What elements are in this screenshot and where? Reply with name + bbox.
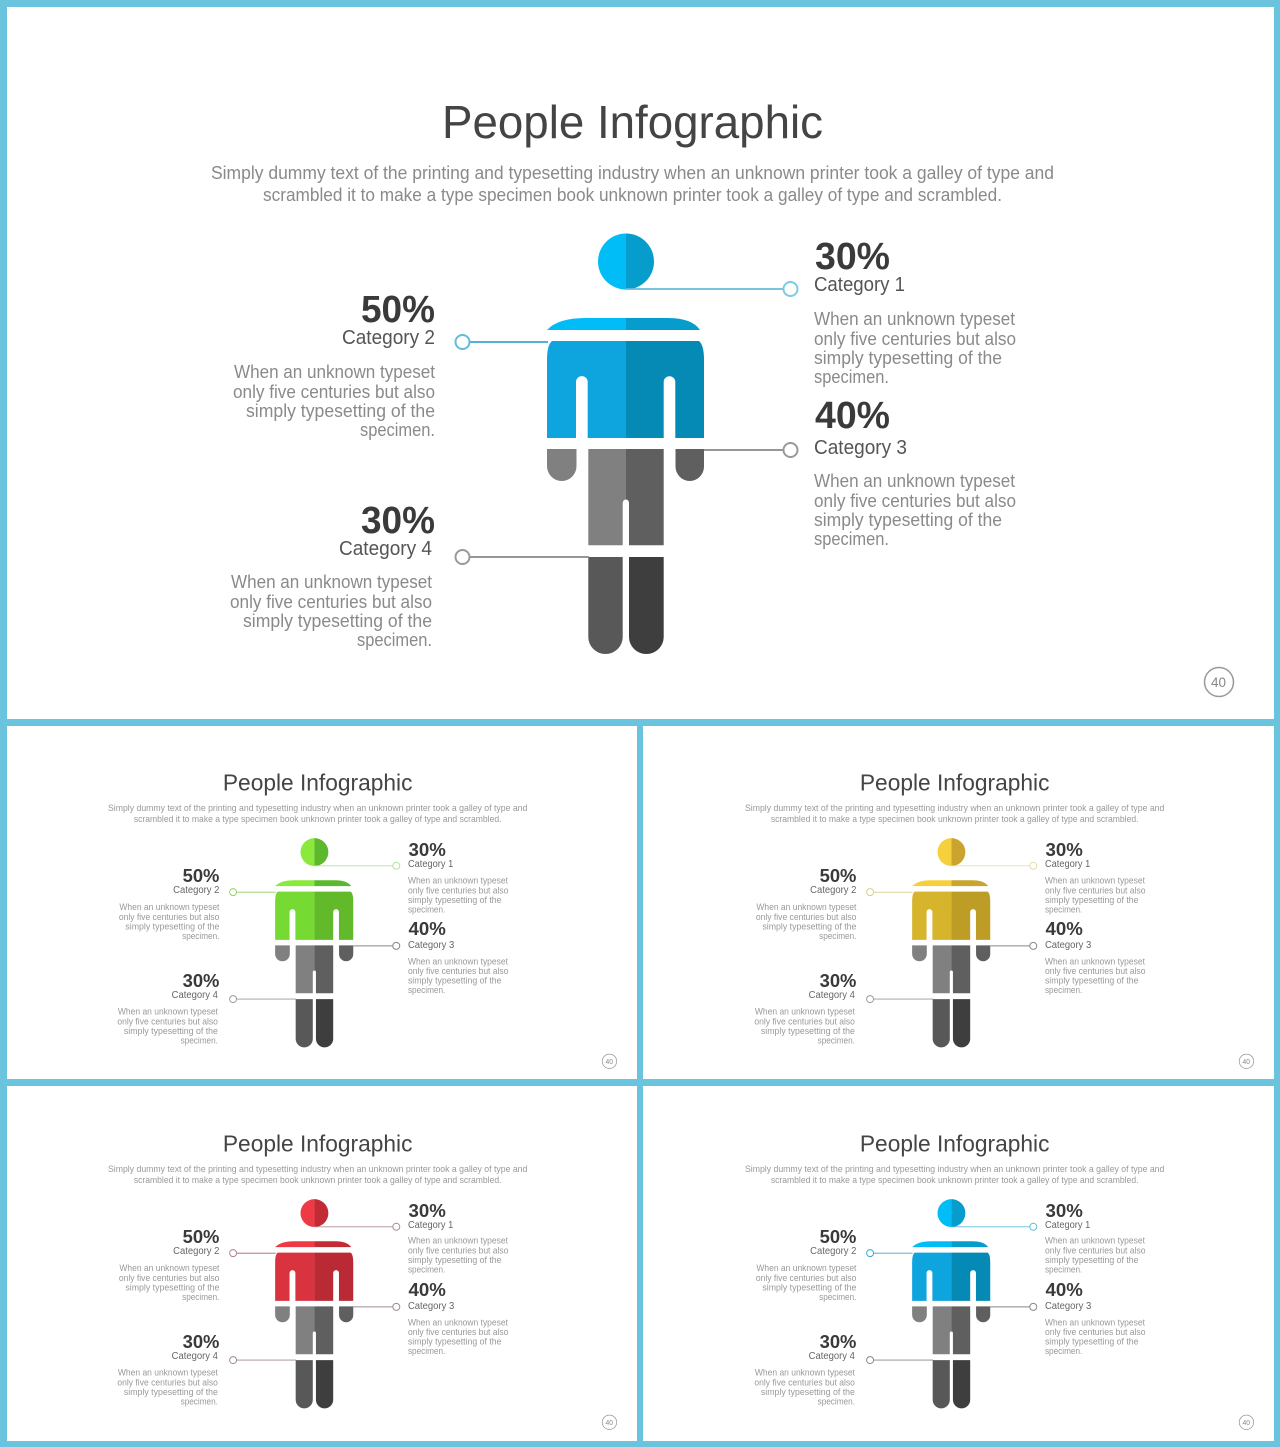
callout: category 2: 50%: [820, 866, 857, 887]
page number: [1239, 1054, 1254, 1069]
callout: category 3: 40%: [1045, 919, 1083, 940]
person figure: [275, 838, 353, 1047]
page number: [602, 1054, 617, 1069]
callout: category 3: Category 3: [814, 437, 907, 459]
callout: category 4: 30%: [820, 1332, 857, 1353]
callout: category 3: simply typesetting of the: [408, 976, 502, 986]
callout: category 1: When an unknown typeset: [814, 309, 1015, 329]
panel: small blue slide: [643, 1086, 1274, 1441]
subtitle: [745, 1164, 1164, 1185]
callout: category 1: specimen.: [1045, 1265, 1082, 1275]
callout connectors: [867, 1223, 1037, 1364]
callout: category 1: When an unknown typeset: [1045, 1236, 1145, 1246]
callout: category 2: only five centuries but also: [119, 1273, 219, 1283]
callout: category 2: simply typesetting of the: [246, 401, 435, 421]
callout: category 2: specimen.: [182, 931, 219, 941]
callout: category 1: 30%: [408, 1201, 446, 1222]
subtitle: [745, 803, 1164, 824]
callout: category 3: When an unknown typeset: [408, 956, 508, 966]
panel: red slide: [7, 1086, 637, 1441]
callout: category 3: simply typesetting of the: [1045, 976, 1139, 986]
callout: category 4: only five centuries but also: [117, 1377, 218, 1387]
callout: category 2: simply typesetting of the: [125, 921, 219, 931]
callout: category 1: specimen.: [408, 905, 445, 915]
callout: category 2: When an unknown typeset: [756, 1263, 857, 1273]
callout: category 1: only five centuries but also: [1045, 886, 1145, 896]
callout: category 2: only five centuries but also: [119, 912, 219, 922]
callout: category 3: When an unknown typeset: [1045, 956, 1145, 966]
callout: category 2: specimen.: [819, 931, 856, 941]
callout: category 4: Category 4: [339, 538, 432, 560]
panel: yellow slide: [643, 726, 1274, 1079]
callout: category 4: When an unknown typeset: [231, 572, 432, 592]
person figure: [912, 838, 990, 1047]
callout connectors: [230, 862, 400, 1003]
callout: category 1: simply typesetting of the: [408, 1255, 502, 1265]
callout: category 1: [408, 1201, 508, 1275]
callout connectors: [867, 862, 1037, 1003]
callout: category 2: specimen.: [819, 1292, 856, 1302]
callout: category 1: specimen.: [814, 367, 889, 387]
callout: category 1: When an unknown typeset: [408, 876, 508, 886]
callout: category 4: only five centuries but also: [230, 592, 432, 612]
callout: category 1: simply typesetting of the: [1045, 895, 1139, 905]
callout: category 3: specimen.: [1045, 985, 1082, 995]
callout: category 2: specimen.: [360, 420, 435, 440]
callout: category 2: 50%: [183, 866, 220, 887]
callout: category 3: specimen.: [408, 1346, 445, 1356]
callout: category 3: specimen.: [408, 985, 445, 995]
page number: [1204, 668, 1234, 696]
callout: category 3: only five centuries but also: [814, 491, 1016, 511]
callout: category 1: only five centuries but also: [1045, 1246, 1145, 1256]
title: People Infographic: [223, 1131, 412, 1157]
callout: category 3: [1045, 919, 1145, 995]
title: People Infographic: [860, 1131, 1049, 1157]
callout: category 2: 50%: [820, 1227, 857, 1248]
subtitle: [108, 1164, 527, 1185]
callout: category 2: simply typesetting of the: [762, 1282, 856, 1292]
callout: category 1: specimen.: [1045, 905, 1082, 915]
callout: category 4: 30%: [361, 500, 435, 542]
callout: category 1: 30%: [1045, 1201, 1083, 1222]
callout: category 3: When an unknown typeset: [814, 471, 1015, 491]
callout: category 3: only five centuries but also: [1045, 966, 1145, 976]
callout: category 1: [1045, 840, 1145, 915]
title: People Infographic: [223, 770, 412, 796]
callout: category 1: simply typesetting of the: [408, 895, 502, 905]
person figure: [275, 1199, 353, 1408]
callout connectors: [230, 1223, 400, 1364]
callout: category 1: 30%: [1045, 840, 1083, 861]
callout: category 3: specimen.: [814, 529, 889, 549]
callout: category 1: When an unknown typeset: [408, 1236, 508, 1246]
page number: 40: [605, 1059, 613, 1066]
callout: category 4: 30%: [183, 1332, 220, 1353]
callout: category 1: [408, 840, 508, 915]
callout: category 3: Category 3: [1045, 940, 1092, 951]
callout: category 3: When an unknown typeset: [408, 1317, 508, 1327]
page number: [1239, 1415, 1254, 1430]
callout: category 3: simply typesetting of the: [1045, 1337, 1139, 1347]
page number: 40: [605, 1420, 613, 1427]
page number: 40: [1242, 1059, 1250, 1066]
callout: category 3: [814, 395, 1016, 549]
callout: category 4: only five centuries but also: [754, 1016, 855, 1026]
callout: category 2: When an unknown typeset: [119, 902, 220, 912]
callout: category 2: specimen.: [182, 1292, 219, 1302]
callout: category 2: [233, 289, 435, 440]
callout: category 2: When an unknown typeset: [119, 1263, 220, 1273]
person figure: [912, 1199, 990, 1408]
callout: category 4: When an unknown typeset: [755, 1368, 855, 1378]
subtitle: scrambled it to make a type specimen book unknown printer took a galley of type and scrambled.: [771, 1175, 1138, 1185]
subtitle: Simply dummy text of the printing and typesetting industry when an unknown printer took a galley of type and: [745, 803, 1164, 813]
callout: category 4: Category 4: [172, 1351, 218, 1362]
callout: category 4: specimen.: [818, 1035, 855, 1045]
callout: category 3: specimen.: [1045, 1346, 1082, 1356]
callout: category 2: Category 2: [810, 1246, 857, 1257]
subtitle: [211, 163, 1054, 205]
callout: category 1: Category 1: [1045, 1220, 1091, 1231]
callout: category 4: only five centuries but also: [117, 1016, 218, 1026]
callout: category 3: 40%: [1045, 1280, 1083, 1301]
panel: green slide: [7, 726, 637, 1079]
callout: category 1: simply typesetting of the: [814, 348, 1002, 368]
callout: category 4: [230, 500, 435, 650]
callout: category 3: [1045, 1280, 1145, 1356]
callout: category 4: specimen.: [357, 630, 432, 650]
callout: category 2: only five centuries but also: [233, 382, 435, 402]
callout: category 3: 40%: [815, 395, 890, 437]
callout: category 3: simply typesetting of the: [814, 510, 1002, 530]
callout: category 4: Category 4: [809, 1351, 855, 1362]
page number: 40: [1242, 1420, 1250, 1427]
callout: category 4: 30%: [820, 971, 857, 992]
callout: category 4: [117, 971, 220, 1045]
callout: category 4: simply typesetting of the: [761, 1026, 855, 1036]
callout: category 3: only five centuries but also: [408, 1327, 508, 1337]
callout: category 1: [814, 236, 1016, 387]
callout: category 3: simply typesetting of the: [408, 1337, 502, 1347]
subtitle: scrambled it to make a type specimen book unknown printer took a galley of type and scrambled.: [134, 1175, 501, 1185]
callout: category 4: specimen.: [818, 1396, 855, 1406]
callout: category 3: Category 3: [1045, 1301, 1092, 1312]
callout connectors: [456, 282, 798, 564]
callout: category 2: 50%: [361, 289, 435, 331]
subtitle: scrambled it to make a type specimen book unknown printer took a galley of type and scrambled.: [134, 814, 501, 824]
callout: category 1: only five centuries but also: [814, 329, 1016, 349]
callout: category 4: simply typesetting of the: [124, 1026, 218, 1036]
callout: category 1: Category 1: [1045, 859, 1091, 870]
callout: category 2: When an unknown typeset: [756, 902, 857, 912]
subtitle: Simply dummy text of the printing and typesetting industry when an unknown printer took a galley of type and: [211, 163, 1054, 183]
callout: category 1: only five centuries but also: [408, 886, 508, 896]
callout: category 1: 30%: [815, 236, 890, 278]
callout: category 2: Category 2: [173, 1246, 220, 1257]
callout: category 4: When an unknown typeset: [118, 1368, 218, 1378]
subtitle: Simply dummy text of the printing and typesetting industry when an unknown printer took a galley of type and: [108, 1164, 527, 1174]
callout: category 1: 30%: [408, 840, 446, 861]
callout: category 4: Category 4: [172, 990, 218, 1001]
callout: category 2: Category 2: [173, 885, 220, 896]
subtitle: scrambled it to make a type specimen book unknown printer took a galley of type and scrambled.: [263, 185, 1002, 205]
callout: category 2: simply typesetting of the: [125, 1282, 219, 1292]
callout: category 1: [1045, 1201, 1145, 1275]
callout: category 1: Category 1: [408, 1220, 454, 1231]
callout: category 3: Category 3: [408, 1301, 455, 1312]
callout: category 1: Category 1: [814, 274, 905, 296]
callout: category 3: Category 3: [408, 940, 455, 951]
callout: category 2: Category 2: [810, 885, 857, 896]
callout: category 3: [408, 1280, 508, 1356]
callout: category 4: simply typesetting of the: [124, 1387, 218, 1397]
title: People Infographic: [442, 96, 823, 148]
callout: category 1: Category 1: [408, 859, 454, 870]
callout: category 2: [119, 1227, 220, 1302]
callout: category 2: only five centuries but also: [756, 912, 856, 922]
callout: category 2: [119, 866, 220, 941]
callout: category 1: specimen.: [408, 1265, 445, 1275]
subtitle: scrambled it to make a type specimen book unknown printer took a galley of type and scrambled.: [771, 814, 1138, 824]
callout: category 4: specimen.: [181, 1396, 218, 1406]
callout: category 4: [754, 971, 857, 1045]
subtitle: Simply dummy text of the printing and typesetting industry when an unknown printer took a galley of type and: [745, 1164, 1164, 1174]
callout: category 4: When an unknown typeset: [118, 1007, 218, 1017]
callout: category 3: 40%: [408, 919, 446, 940]
callout: category 1: only five centuries but also: [408, 1246, 508, 1256]
callout: category 2: [756, 866, 857, 941]
callout: category 3: only five centuries but also: [1045, 1327, 1145, 1337]
title: People Infographic: [860, 770, 1049, 796]
callout: category 4: simply typesetting of the: [761, 1387, 855, 1397]
callout: category 4: simply typesetting of the: [243, 611, 432, 631]
callout: category 2: Category 2: [342, 327, 435, 349]
callout: category 3: When an unknown typeset: [1045, 1317, 1145, 1327]
page number: 40: [1211, 674, 1226, 690]
callout: category 4: [754, 1332, 857, 1406]
callout: category 4: specimen.: [181, 1035, 218, 1045]
panel: main blue slide: [7, 7, 1274, 719]
callout: category 4: only five centuries but also: [754, 1377, 855, 1387]
callout: category 2: [756, 1227, 857, 1302]
callout: category 2: simply typesetting of the: [762, 921, 856, 931]
callout: category 1: simply typesetting of the: [1045, 1255, 1139, 1265]
callout: category 4: Category 4: [809, 990, 855, 1001]
person figure: [547, 234, 704, 654]
callout: category 1: When an unknown typeset: [1045, 876, 1145, 886]
callout: category 2: When an unknown typeset: [234, 362, 435, 382]
callout: category 3: 40%: [408, 1280, 446, 1301]
callout: category 4: [117, 1332, 220, 1406]
subtitle: [108, 803, 527, 824]
callout: category 4: When an unknown typeset: [755, 1007, 855, 1017]
callout: category 2: 50%: [183, 1227, 220, 1248]
callout: category 4: 30%: [183, 971, 220, 992]
callout: category 3: [408, 919, 508, 995]
callout: category 3: only five centuries but also: [408, 966, 508, 976]
page number: [602, 1415, 617, 1430]
callout: category 2: only five centuries but also: [756, 1273, 856, 1283]
subtitle: Simply dummy text of the printing and typesetting industry when an unknown printer took a galley of type and: [108, 803, 527, 813]
